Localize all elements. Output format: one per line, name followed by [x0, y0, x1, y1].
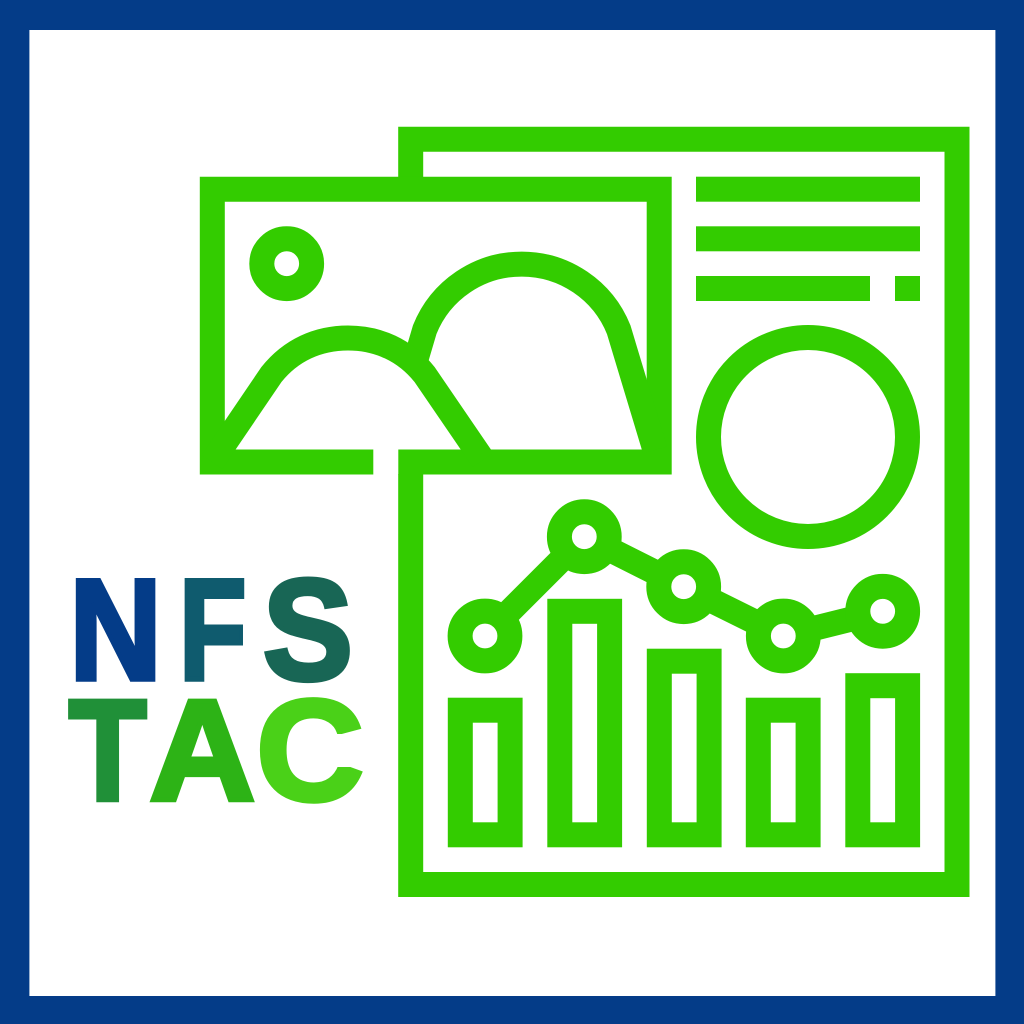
document outline [411, 139, 957, 884]
letter T: T [69, 670, 146, 831]
back mountain [414, 264, 655, 450]
front mountain [212, 338, 483, 462]
sun [262, 239, 312, 289]
letter N: N [70, 549, 162, 710]
bar chart [460, 611, 908, 835]
letter F: F [179, 550, 246, 711]
pie chart circle [708, 338, 908, 536]
icon: landscape picture [212, 189, 659, 462]
letter A: A [150, 670, 255, 831]
letter C terminal cut [337, 734, 373, 767]
text lines [696, 177, 920, 301]
line chart with data points [460, 512, 908, 661]
letter S: S [263, 550, 353, 710]
letter C: C [256, 670, 363, 830]
icon: report document [411, 139, 957, 884]
picture frame [212, 189, 659, 462]
wordmark: NFS TAC [69, 549, 373, 831]
